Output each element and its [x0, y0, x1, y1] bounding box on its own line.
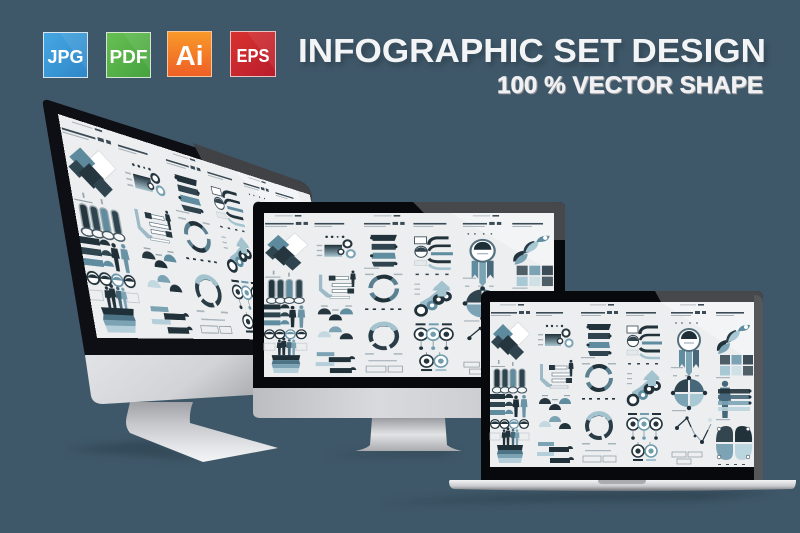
monitor screen — [264, 213, 554, 377]
icon: EPS file — [230, 32, 276, 76]
icon: PDF file — [106, 32, 150, 78]
monitor chin — [253, 385, 565, 418]
icon: JPG file: JPG — [48, 47, 84, 67]
title: INFOGRAPHIC SET DESIGN — [298, 33, 766, 70]
icon: Ai file — [168, 32, 212, 76]
monitor chin — [85, 355, 300, 404]
laptop base — [449, 480, 796, 491]
monitor bezel — [43, 100, 312, 356]
icon: Ai file: Ai — [176, 40, 204, 71]
subtitle: 100 % VECTOR SHAPE — [497, 72, 763, 99]
laptop screen — [490, 302, 754, 467]
left monitor screen — [58, 114, 343, 340]
monitor stand — [355, 418, 462, 451]
icon: EPS file: EPS — [236, 46, 270, 66]
icon: PDF file: PDF — [110, 47, 148, 67]
laptop lid — [481, 291, 763, 480]
icon: JPG file — [44, 32, 88, 78]
monitor bezel — [253, 202, 565, 388]
monitor stand — [126, 402, 278, 462]
